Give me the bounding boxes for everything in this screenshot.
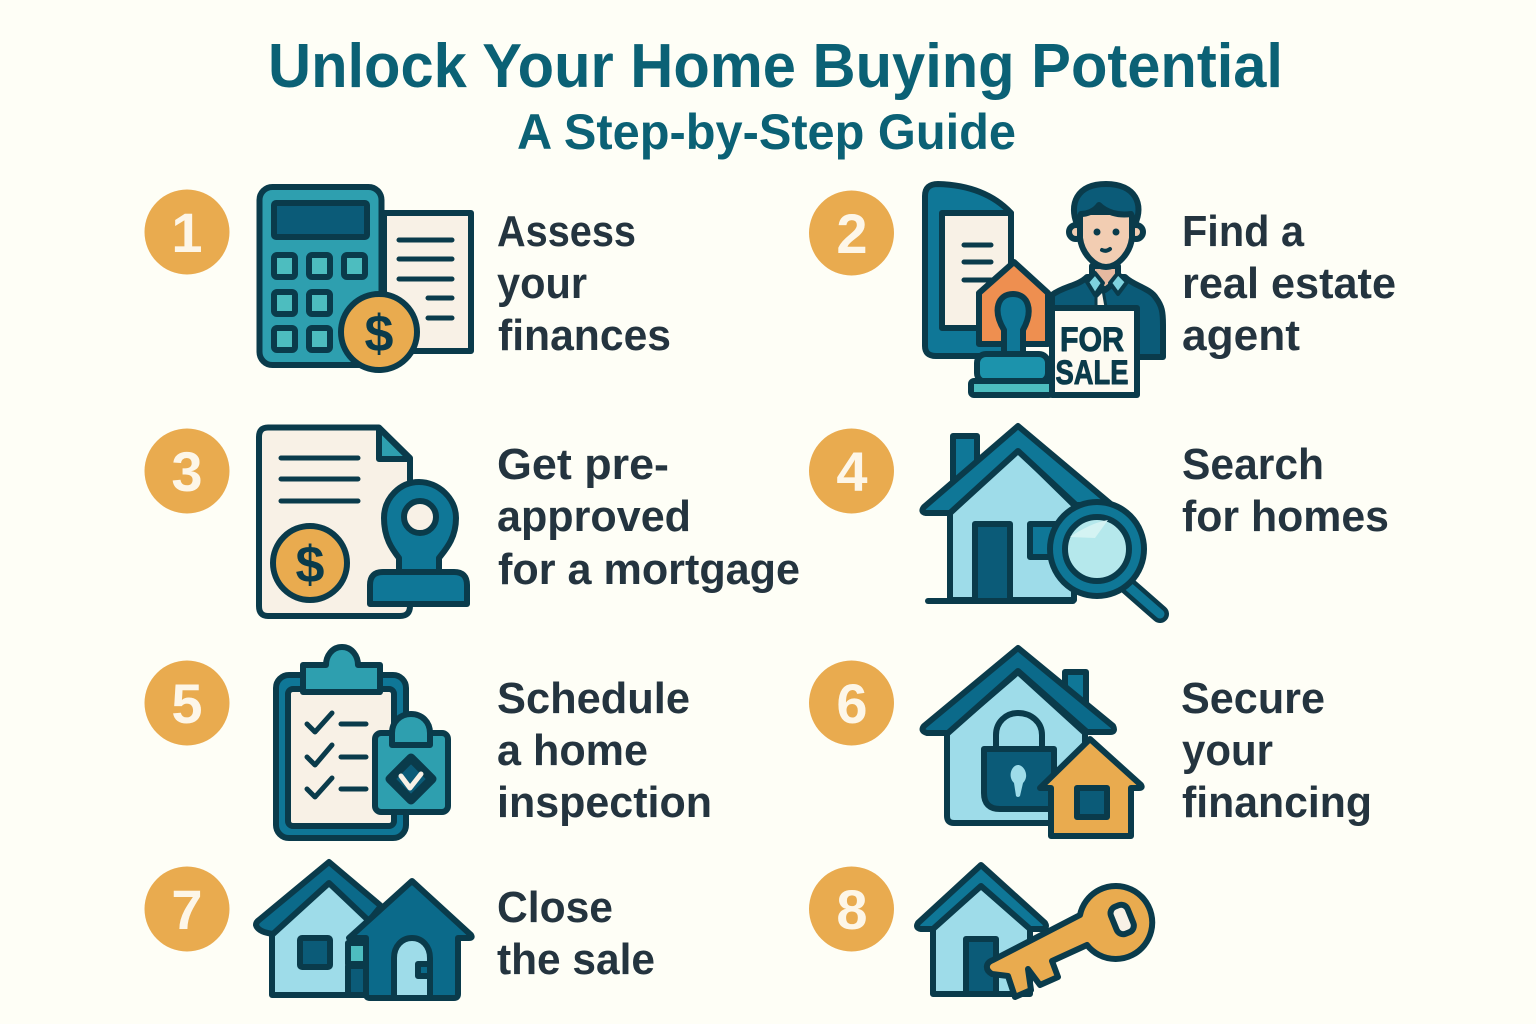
icon: agent with listing and for sale sign: FOR bbox=[1060, 321, 1124, 359]
icon: calculator with document and coin: $ bbox=[365, 305, 394, 363]
label step 5: inspection bbox=[497, 778, 712, 827]
icon: agent with listing and for sale sign bbox=[925, 184, 1163, 395]
panel: step 7 close sale bbox=[144, 862, 655, 998]
title: Unlock Your Home Buying Potential bbox=[268, 32, 1283, 101]
label step 1: your bbox=[497, 259, 587, 308]
label step 7: the sale bbox=[497, 935, 655, 984]
icon: agent with listing and for sale sign: SALE bbox=[1056, 354, 1128, 392]
number badge 7 bbox=[144, 866, 230, 952]
panel: step 1 assess finances bbox=[144, 187, 671, 370]
icon: mortgage document with coin and stamp: $ bbox=[296, 536, 325, 594]
label step 6: financing bbox=[1182, 778, 1372, 827]
number badge 4: 4 bbox=[836, 440, 868, 503]
label step 5 bbox=[497, 674, 712, 827]
label step 1 bbox=[497, 207, 671, 360]
number badge 7: 7 bbox=[171, 878, 203, 941]
panel: step 8 keys bbox=[809, 865, 1152, 997]
label step 3: for a mortgage bbox=[498, 545, 800, 594]
label step 3: approved bbox=[497, 492, 691, 541]
label step 2: real estate bbox=[1182, 259, 1396, 308]
label step 1: Assess bbox=[497, 207, 636, 256]
panel: step 3 pre-approval bbox=[144, 428, 800, 616]
icon: clipboard checklist with lock bbox=[276, 647, 448, 838]
label step 2: Find a bbox=[1182, 207, 1304, 256]
label step 4: Search bbox=[1182, 440, 1324, 489]
icon: calculator with document and coin bbox=[260, 187, 471, 370]
panel: step 5 home inspection bbox=[144, 647, 712, 838]
panel: step 2 find agent bbox=[809, 184, 1396, 395]
label step 2: agent bbox=[1182, 311, 1300, 360]
number badge 5 bbox=[144, 660, 230, 746]
number badge 6: 6 bbox=[836, 672, 868, 735]
number badge 2: 2 bbox=[836, 202, 868, 265]
label step 7: Close bbox=[497, 883, 613, 932]
icon: two houses bbox=[256, 862, 472, 998]
number badge 1: 1 bbox=[171, 201, 203, 264]
panel: step 4 search homes bbox=[809, 426, 1389, 614]
panel: step 6 secure financing bbox=[809, 648, 1372, 836]
label step 7 bbox=[497, 883, 655, 984]
number badge 5: 5 bbox=[171, 672, 203, 735]
subtitle: A Step-by-Step Guide bbox=[517, 104, 1016, 160]
label step 6: your bbox=[1182, 726, 1273, 775]
label step 1: finances bbox=[498, 311, 671, 360]
number badge 8 bbox=[809, 866, 894, 952]
number badge 3: 3 bbox=[171, 440, 203, 503]
label step 5: Schedule bbox=[497, 674, 690, 723]
number badge 8: 8 bbox=[836, 878, 868, 941]
label step 3 bbox=[497, 440, 800, 594]
icon: house with magnifying glass bbox=[922, 426, 1160, 614]
icon: mortgage document with coin and stamp bbox=[259, 428, 467, 616]
number badge 6 bbox=[809, 660, 894, 746]
icon: house with key bbox=[917, 865, 1152, 997]
number badge 1 bbox=[144, 190, 230, 274]
icon: house with padlock and small house bbox=[923, 648, 1142, 836]
label step 5: a home bbox=[497, 726, 648, 775]
label step 6: Secure bbox=[1181, 674, 1325, 723]
number badge 4 bbox=[809, 428, 894, 514]
label step 4: for homes bbox=[1182, 492, 1389, 541]
number badge 2 bbox=[809, 190, 894, 276]
label step 4 bbox=[1182, 440, 1389, 541]
number badge 3 bbox=[144, 428, 230, 514]
label step 6 bbox=[1181, 674, 1372, 827]
label step 3: Get pre- bbox=[497, 440, 669, 489]
label step 2 bbox=[1182, 207, 1396, 360]
